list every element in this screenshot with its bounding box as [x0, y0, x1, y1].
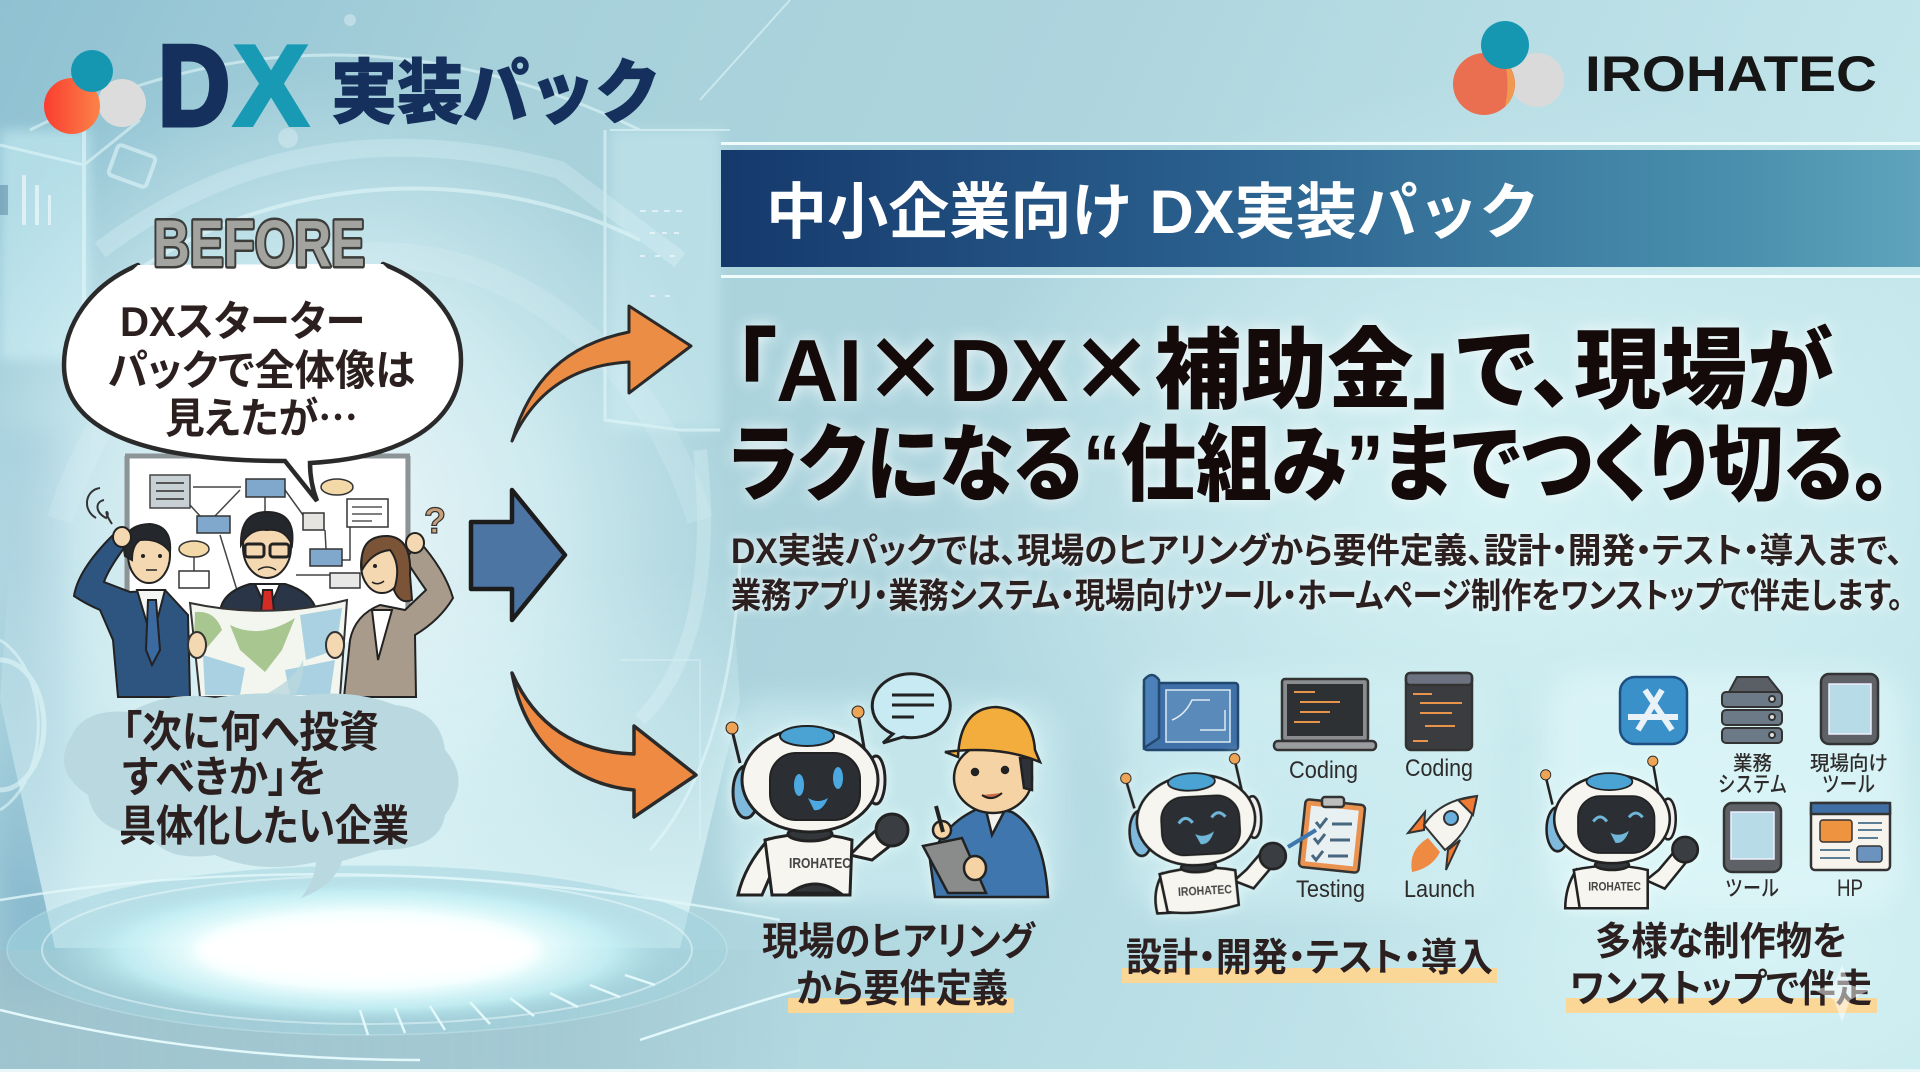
- persona cloud bubble: すべきか」を: [122, 754, 326, 802]
- logo: IROHATEC: [1453, 21, 1877, 115]
- icon: blueprint: [1144, 675, 1238, 750]
- watermark sparkle: [1814, 965, 1870, 1022]
- caption: deliverables: 多様な制作物を: [1595, 921, 1847, 964]
- before speech bubble: DXスターター: [120, 298, 365, 345]
- icon: webpage: [1811, 803, 1890, 870]
- label: tools: ツール: [1725, 876, 1779, 901]
- label: field tools: 現場向け: [1810, 752, 1888, 775]
- icon: code window: [1406, 673, 1472, 750]
- caption: hearing: から要件定義: [796, 968, 1008, 1011]
- label: field tools: ツール: [1822, 772, 1875, 797]
- icon: tablet: [1724, 803, 1781, 872]
- robot: development: IROHATEC: [1178, 882, 1232, 899]
- caption: hearing: 現場のヒアリング: [762, 921, 1037, 964]
- logo: DX 実装パック: [44, 23, 661, 150]
- panel: development: [1120, 670, 1497, 983]
- icon: server: [1722, 677, 1782, 743]
- panel: deliverables: [1541, 670, 1905, 1022]
- description text: DX実装パックでは、現場のヒアリングから要件定義、設計・開発・テスト・導入まで、: [731, 532, 1903, 571]
- description text: [731, 532, 1903, 616]
- icon: test clipboard: [1288, 797, 1365, 873]
- robot: hearing: [726, 706, 908, 895]
- logo: IROHATEC: IROHATEC: [1585, 46, 1877, 102]
- title banner: [721, 142, 1920, 278]
- person: woman: [344, 533, 453, 697]
- before label: BEFORE: [153, 206, 365, 280]
- map: [188, 600, 347, 697]
- arrow: orange down: [512, 673, 696, 817]
- arrow: blue right: [471, 490, 565, 620]
- label: launch: Launch: [1404, 876, 1475, 903]
- label: HP: HP: [1837, 875, 1863, 902]
- persona cloud bubble: 具体化したい企業: [119, 803, 409, 851]
- icon: confusion scribble: [87, 488, 112, 524]
- icon: question mark: ?: [424, 500, 446, 541]
- caption: deliverables: ワンストップで伴走: [1570, 968, 1872, 1011]
- platform: [0, 950, 800, 1069]
- caption: deliverables: [1566, 921, 1877, 1013]
- title banner: 中小企業向け DX実装パック: [766, 178, 1540, 246]
- logo: DX 実装パック: 実装パック: [331, 54, 661, 132]
- caption: hearing: [762, 921, 1037, 1013]
- person: left man: [74, 524, 190, 697]
- persona cloud bubble: [64, 660, 458, 898]
- before speech bubble: [64, 206, 461, 501]
- speech bubble icon: [872, 674, 950, 743]
- logo: DX 実装パック: D: [158, 23, 230, 150]
- headline: [729, 300, 1891, 512]
- before speech bubble: パックで全体像は: [108, 347, 415, 394]
- robot: deliverables: IROHATEC: [1588, 879, 1641, 893]
- label: business system: 業務: [1733, 752, 1772, 775]
- worker: [923, 707, 1048, 897]
- caption: development: 設計・開発・テスト・導入: [1126, 937, 1493, 980]
- robot: hearing: IROHATEC: [789, 855, 851, 872]
- icon: rocket: [1408, 796, 1477, 872]
- whiteboard: [125, 456, 410, 642]
- icon: tablet: [1821, 674, 1878, 744]
- before speech bubble: 見えたが…: [165, 385, 358, 446]
- logo: DX 実装パック: X: [234, 23, 308, 150]
- robot: deliverables: [1541, 756, 1698, 908]
- robot: development: [1120, 751, 1289, 916]
- label: business system: [1718, 752, 1787, 797]
- person: center man: [220, 512, 317, 612]
- label: coding: Coding: [1289, 757, 1358, 784]
- label: business system: システム: [1718, 772, 1787, 797]
- panel: hearing: [725, 674, 1060, 1013]
- arrow: orange up: [512, 306, 691, 441]
- persona cloud bubble: 「次に何へ投資: [122, 709, 379, 757]
- headline: 「AI×DX×補助金」で、現場が: [733, 300, 1834, 427]
- label: coding: Coding: [1405, 755, 1473, 782]
- label: field tools: [1810, 752, 1888, 797]
- label: testing: Testing: [1296, 876, 1365, 903]
- logo mark: three circles: [44, 50, 146, 134]
- illustration: confused team with whiteboard and map: [74, 456, 453, 697]
- icon: laptop: [1274, 679, 1376, 750]
- icon: app store: [1620, 677, 1687, 744]
